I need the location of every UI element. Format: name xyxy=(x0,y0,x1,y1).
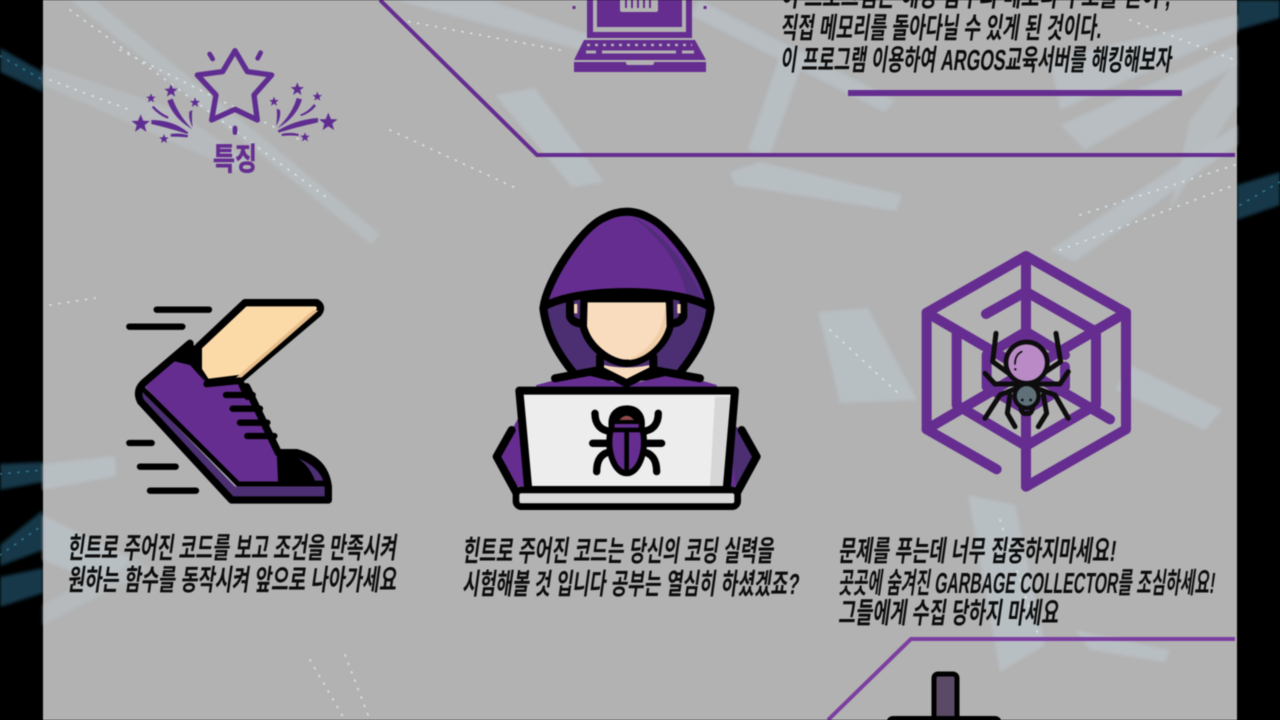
icon: hacker with laptop xyxy=(497,212,757,507)
text block: hint description: 원하는 함수를 동작시켜 앞으로 나아가세요 xyxy=(66,564,400,597)
heading underline bar xyxy=(848,90,1182,96)
text block: hint description xyxy=(66,532,400,597)
icon: partial lower device xyxy=(887,674,1001,720)
text block: garbage collector warning: 그들에게 수집 당하지 마세요 xyxy=(837,597,1062,630)
text block: hint description: 힌트로 주어진 코드를 보고 조건을 만족시켜 xyxy=(66,532,400,565)
icon: laptop xyxy=(574,0,706,72)
top frame line xyxy=(380,0,1235,155)
text block: intro xyxy=(779,0,1175,77)
text block: coding skill description xyxy=(461,535,802,601)
text block: intro: 직접 메모리를 돌아다닐 수 있게 된 것이다. xyxy=(779,12,1105,45)
icon: spider on web xyxy=(927,256,1126,487)
heading: features: 특징 xyxy=(213,142,257,177)
icon: running shoe xyxy=(129,303,330,500)
text block: garbage collector warning: 문제를 푸는데 너무 집중하지마세요! xyxy=(837,535,1119,568)
bottom frame line xyxy=(828,639,1235,720)
text block: garbage collector warning xyxy=(837,535,1218,630)
text block: coding skill description: 시험해볼 것 입니다 공부는 열심히 하셨겠죠? xyxy=(461,568,802,601)
icon: star burst xyxy=(131,51,337,143)
text block: coding skill description: 힌트로 주어진 코드는 당신의 코딩 실력을 xyxy=(461,535,777,568)
